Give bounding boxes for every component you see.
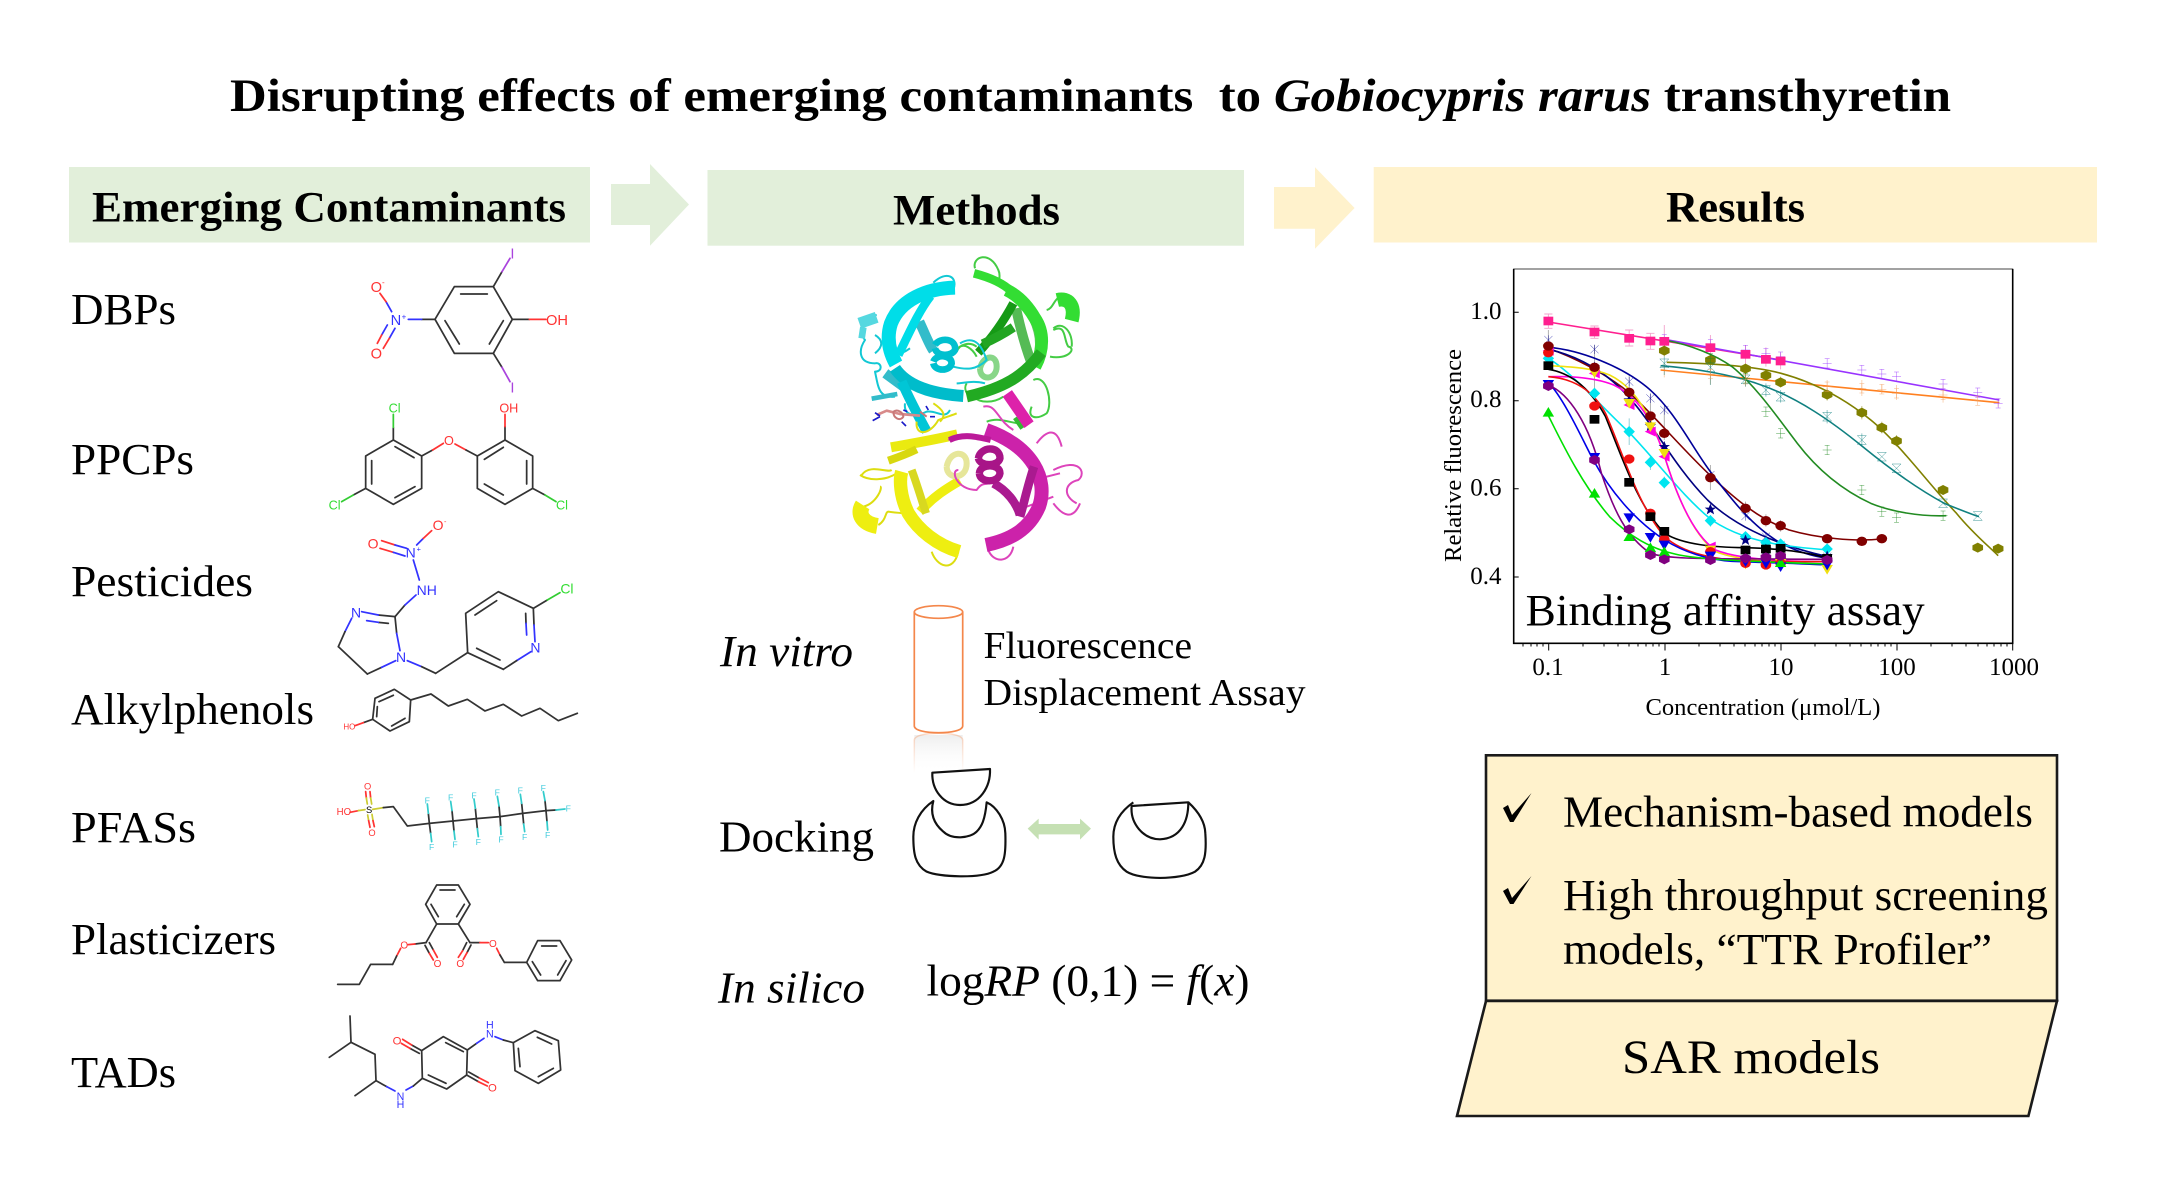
markers: magenta triangles [1543,346,1716,552]
markers: pink squares [1543,317,1786,365]
x axis title: Concentration (μmol/L) [1646,695,1880,721]
molecule: PPCP triclosan: OH [499,402,518,416]
arrow: binding equilibrium [1028,819,1091,840]
panel heading: Methods [708,170,1244,246]
molecule: PPCP triclosan: Cl [556,498,568,512]
data series [1543,314,2003,575]
molecule: TAD quinone diamine: N [486,1028,494,1040]
panel heading: Methods: Methods [893,188,1060,234]
panel heading: Emerging Contaminants: Emerging Contaminants [92,184,566,232]
error bars [1544,314,1998,532]
fitted curves [1548,322,1999,565]
ligand in binding site [873,406,935,426]
molecule: TAD quinone diamine: N [397,1091,404,1103]
panel heading: Emerging Contaminants [69,167,590,242]
chart: binding affinity curves [1441,269,2039,721]
molecule: DBP nitro-diiodophenol: - [382,278,385,287]
bullet: high throughput screening models: models, “TTR Profiler” [1563,925,1992,974]
molecule: pesticide imidacloprid [338,517,574,674]
markers: dark red circles [1543,341,1887,546]
x axis tick labels: 10 [1768,654,1794,681]
molecule: pesticide imidacloprid: - [444,517,447,526]
molecule: PPCP triclosan: Cl [389,402,401,416]
molecule: PPCP triclosan: O [444,434,454,448]
chain: green [957,257,1073,427]
molecule: pesticide imidacloprid: Cl [560,580,574,596]
molecule: pesticide imidacloprid: + [417,545,421,554]
molecule: PFAS fluorotelomer sulfonate: F [541,783,546,793]
contaminant class labels [71,285,314,1097]
x axis ticks [1514,312,2013,650]
x axis tick labels [1532,654,2039,681]
plot frame [1514,269,2013,643]
molecule: plasticizer butyl benzyl phthalate: O [434,959,442,970]
molecule: PFAS fluorotelomer sulfonate: F [471,790,477,800]
molecule: PFAS fluorotelomer sulfonate: F [425,795,430,805]
ligand, undocked [932,769,990,805]
panel heading: Results [1374,167,2097,242]
markers: black squares [1543,361,1832,563]
label: PFASs: PFASs [71,803,196,852]
y axis tick labels: 0.6 [1470,475,1502,502]
molecule: alkylphenol nonylphenol [343,689,577,731]
molecule: TAD quinone diamine [329,1016,561,1111]
bullet: mechanism-based models: Mechanism-based models [1563,788,2033,837]
molecule: PFAS fluorotelomer sulfonate [337,781,571,852]
molecule: DBP nitro-diiodophenol: OH [546,313,568,329]
chain: cyan [859,276,987,431]
receptor, undocked [913,801,1005,876]
markers: green plus [1706,354,1948,522]
y axis tick labels: 1.0 [1470,298,1502,325]
label: Alkylphenols: Alkylphenols [71,685,314,734]
label: Plasticizers: Plasticizers [71,915,276,964]
molecule: DBP nitro-diiodophenol: O [371,280,382,296]
docking schematic [913,769,1206,878]
markers: blue triangles [1543,380,1833,572]
chain: yellow [860,403,967,566]
molecule: PFAS fluorotelomer sulfonate: S [366,805,372,815]
label: DBPs: DBPs [71,285,176,334]
assay name: Displacement Assay [984,672,1306,714]
chain: magenta [948,393,1082,560]
arrow: contaminants to methods [611,164,689,246]
results box: model outcomes [1486,755,2057,1001]
method label: In silico: In silico [717,964,865,1012]
markers: orange plus [1706,369,1982,405]
molecule: PFAS fluorotelomer sulfonate: F [448,793,453,803]
molecule: PFAS fluorotelomer sulfonate: F [495,788,500,798]
assay name: Fluorescence [984,625,1192,667]
icon: check mark one [1503,793,1532,822]
label: Pesticides: Pesticides [71,557,253,606]
markers: cyan diamonds [1543,353,1833,555]
molecule: pesticide imidacloprid: NH [417,582,437,598]
markers: purple plus [1660,335,2003,408]
icon: fluorescence cuvette [914,606,963,773]
y axis tick labels: 0.4 [1470,563,1502,590]
label: TADs: TADs [71,1048,176,1097]
molecule: TAD quinone diamine: O [488,1082,497,1094]
molecule: PFAS fluorotelomer sulfonate: F [518,786,523,796]
x axis tick labels: 1000 [1989,654,2039,681]
molecule: alkylphenol nonylphenol: HO [343,722,355,731]
molecule: PFAS fluorotelomer sulfonate: HO [337,807,352,818]
bullet: high throughput screening models: High throughput screening [1563,871,2048,920]
markers: red circles [1543,348,1832,570]
markers: teal crosses [1660,359,1982,520]
molecule: DBP nitro-diiodophenol [371,246,568,396]
molecule: pesticide imidacloprid: N [406,544,416,560]
markers: olive hexagons [1659,346,2003,554]
molecule: PFAS fluorotelomer sulfonate: F [498,835,504,845]
molecule: PPCP triclosan [329,402,568,512]
assay name [984,625,1306,714]
molecule: PFAS fluorotelomer sulfonate: O [364,781,371,791]
chart caption: Binding affinity assay [1526,586,1925,635]
method label: Docking: Docking [719,813,874,862]
y axis tick labels: 0.8 [1470,386,1502,413]
label: PPCPs: PPCPs [71,435,194,484]
molecule: plasticizer butyl benzyl phthalate [338,885,572,984]
molecule: pesticide imidacloprid: N [396,649,406,665]
molecule: DBP nitro-diiodophenol: O [371,347,382,363]
molecule: TAD quinone diamine: H [486,1020,494,1032]
molecule: DBP nitro-diiodophenol: + [402,312,407,321]
y axis title: Relative fluorescence [1441,349,1467,562]
protein structure: TTR tetramer ribbon [859,257,1082,566]
molecule: PFAS fluorotelomer sulfonate: O [368,828,376,838]
x axis tick labels: 0.1 [1532,654,1564,681]
panel heading: Results: Results [1666,184,1805,232]
molecule: DBP nitro-diiodophenol: I [510,246,514,262]
method label: In vitro: In vitro [719,627,853,676]
molecule: PFAS fluorotelomer sulfonate: F [545,830,550,840]
molecule: TAD quinone diamine: O [393,1036,402,1048]
molecules group one [329,246,577,731]
molecule: TAD quinone diamine: H [397,1099,404,1111]
molecule: plasticizer butyl benzyl phthalate: O [489,939,497,950]
title: Disrupting effects of emerging contaminants to Gobiocypris rarus transthyretin [230,70,1951,122]
molecule: plasticizer butyl benzyl phthalate: O [456,959,464,970]
y axis tick labels [1470,298,1502,590]
molecule: PPCP triclosan: Cl [329,498,341,512]
markers: purple hexagons [1543,381,1832,565]
molecule: DBP nitro-diiodophenol: N [391,313,401,329]
markers: navy stars [1589,362,1833,561]
molecule: PFAS fluorotelomer sulfonate: F [452,840,458,850]
molecule: pesticide imidacloprid: O [368,535,379,551]
equation: logRP (0,1) = f(x) [926,957,1250,1006]
molecule: PFAS fluorotelomer sulfonate: F [566,804,571,814]
molecule: plasticizer butyl benzyl phthalate: O [400,940,408,951]
molecule: pesticide imidacloprid: O [433,517,444,533]
markers: navy asterisks [1544,335,1831,561]
results box: SAR models: SAR models [1622,1031,1880,1084]
molecule: pesticide imidacloprid: N [351,605,361,621]
molecule: DBP nitro-diiodophenol: I [510,380,514,396]
icon: check mark two [1503,876,1532,904]
molecule: PFAS fluorotelomer sulfonate: F [429,842,434,852]
molecule: PFAS fluorotelomer sulfonate: F [522,832,527,842]
receptor-ligand complex [1113,802,1206,878]
molecule: pesticide imidacloprid: N [530,640,540,656]
markers: green triangles [1543,407,1786,567]
arrow: methods to results [1274,167,1355,249]
results box: SAR models [1457,1001,2057,1116]
bullet: high throughput screening models [1563,871,2048,974]
molecules group two [329,781,572,1111]
molecule: PFAS fluorotelomer sulfonate: F [476,837,481,847]
x axis tick labels: 100 [1878,654,1916,681]
markers: yellow triangles [1543,346,1833,575]
x axis tick labels: 1 [1659,654,1671,681]
